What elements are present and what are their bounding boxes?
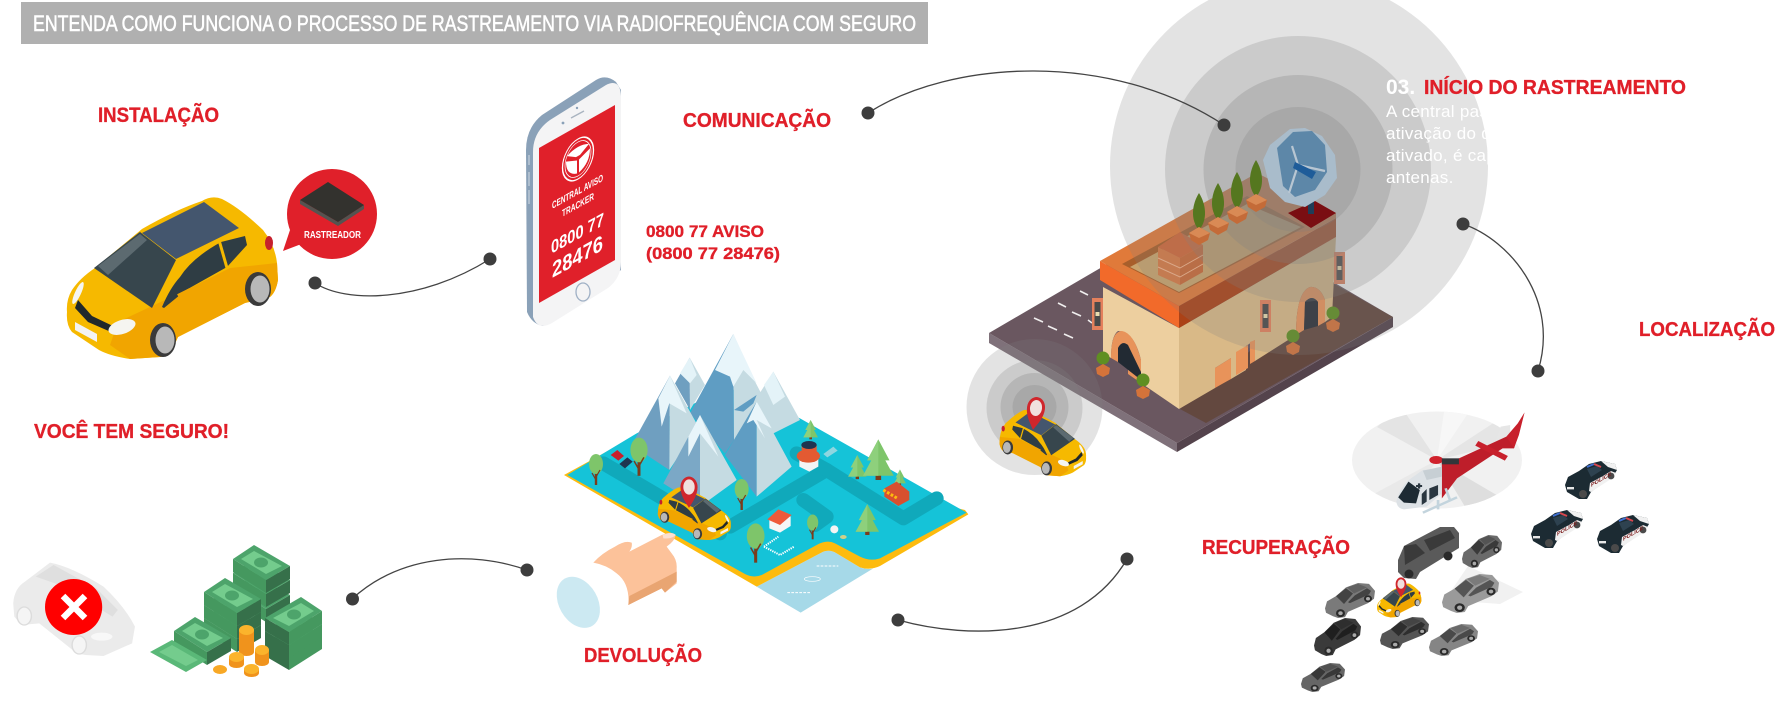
title banner (21, 2, 928, 44)
heading: instalação: INSTALAÇÃO (98, 104, 219, 127)
icon: satellite dish (1263, 128, 1337, 228)
step 03 text: 03. (1386, 76, 1415, 99)
fence (764, 537, 794, 555)
coins (213, 625, 269, 677)
arrow: comunicação to antenna (862, 71, 1230, 132)
step 03 text: A central pas (1386, 102, 1488, 121)
small objects (611, 447, 847, 539)
heading: devolução: DEVOLUÇÃO (584, 644, 702, 667)
icon: smartphone: 28476 (552, 231, 603, 284)
icon: helicopter (1352, 405, 1525, 515)
trees (589, 420, 906, 563)
heading: você tem seguro: VOCÊ TEM SEGURO! (34, 419, 229, 443)
illustration: building on city block (989, 173, 1393, 452)
icon: tracked car (1000, 396, 1086, 476)
text: phone number: (0800 77 28476) (646, 245, 780, 263)
windows signs (1092, 298, 1103, 330)
arrow: antenna to localização (1456, 218, 1544, 378)
police cars: POLICE (1557, 520, 1578, 538)
chimney (1158, 232, 1203, 285)
icon: money stacks and coins (150, 545, 322, 677)
icon: crossed-out lost car (13, 563, 135, 656)
police cars: POLICE (1623, 525, 1644, 543)
roof plants (1189, 160, 1267, 245)
text: phone number (646, 223, 780, 263)
illustration: map with mountains (548, 334, 968, 636)
potted bushes (1096, 306, 1340, 399)
icon: tracker bubble: RASTREADOR (304, 230, 362, 241)
house (767, 509, 792, 533)
step 03 text: ativação do d (1386, 124, 1491, 143)
title banner: ENTENDA COMO FUNCIONA O PROCESSO DE RASTREAMENTO VIA RADIOFREQUÊNCIA COM SEGURO (33, 11, 916, 36)
text: phone number: 0800 77 AVISO (646, 223, 764, 241)
arrow: devolução to money (346, 559, 534, 606)
icon: phone logo (562, 130, 594, 188)
heading: comunicação: COMUNICAÇÃO (683, 109, 831, 132)
mountains (632, 334, 800, 507)
icon: smartphone: 0800 77 (551, 210, 604, 259)
icon: yellow car (67, 197, 278, 359)
icon: smartphone: TRACKER (562, 191, 594, 220)
icon: stolen car located (1377, 577, 1421, 617)
big signal rings (1110, 0, 1488, 355)
step 03 text: INÍCIO DO RASTREAMENTO (1424, 76, 1686, 99)
icon: smartphone: CENTRAL AVISO (552, 172, 603, 212)
step 03 text: antenas. (1386, 168, 1454, 187)
coffee building (797, 441, 820, 472)
icon: pointing hand (548, 533, 677, 636)
police cars: POLICE (1591, 471, 1612, 489)
step 03 text (1386, 76, 1686, 187)
icon: map car with pin (658, 477, 731, 540)
small car signal rings (966, 339, 1102, 475)
icon: tracker bubble (283, 169, 377, 259)
step 03 text: ativado, é cap (1386, 146, 1496, 165)
shop (883, 482, 909, 506)
traffic cars (1301, 527, 1523, 692)
police cars (1531, 461, 1649, 553)
heading: recuperação: RECUPERAÇÃO (1202, 536, 1350, 559)
icon: smartphone (526, 77, 621, 326)
arrow: instalação to comunicação (308, 252, 496, 296)
arrow: recuperação to devolução (892, 552, 1134, 631)
